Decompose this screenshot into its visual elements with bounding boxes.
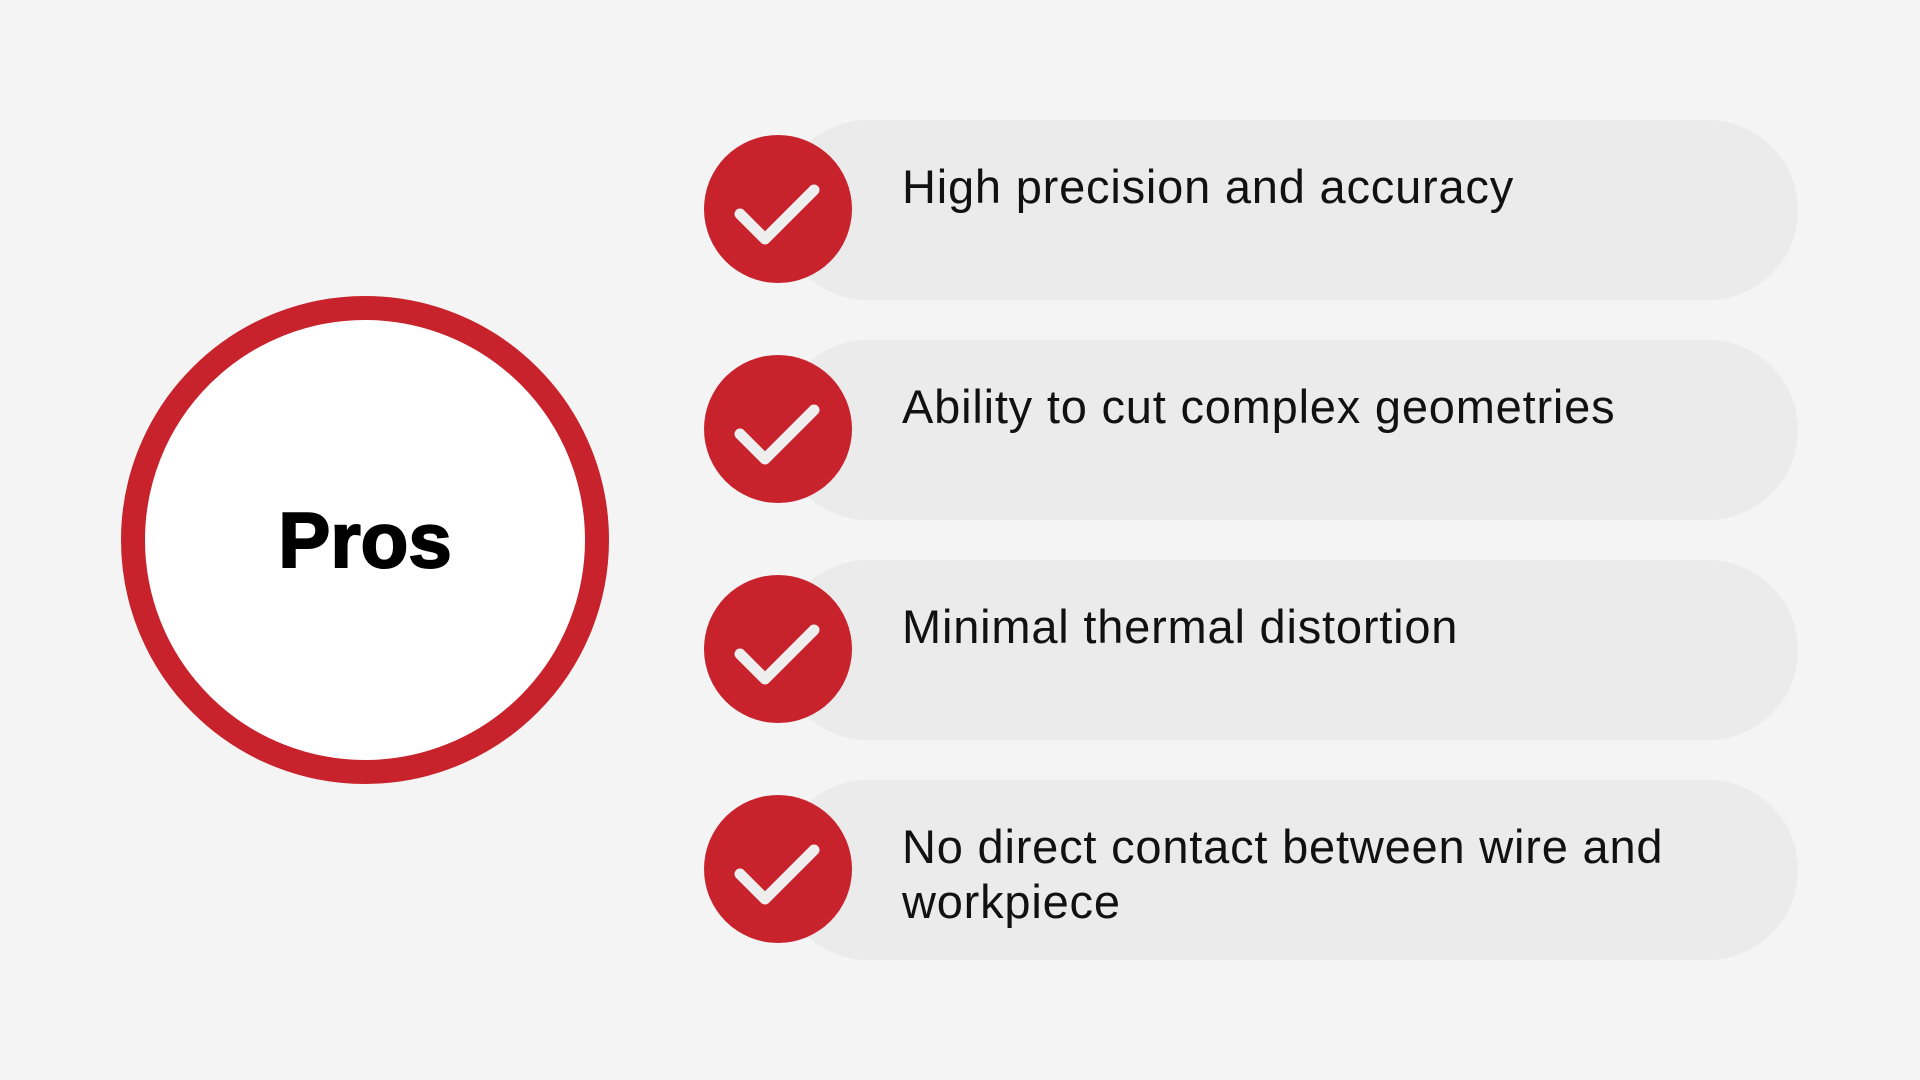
text: Ability to cut complex geometries — [902, 380, 1615, 433]
pros circle — [121, 296, 609, 784]
item 4 — [704, 780, 1798, 960]
icon: check — [704, 135, 852, 283]
text: Minimal thermal distortion — [902, 600, 1458, 653]
icon: check — [704, 795, 852, 943]
icon: check — [704, 355, 852, 503]
text: No direct contact between wire and workpiece — [902, 820, 1663, 928]
item 1 — [704, 120, 1798, 300]
item 2 — [704, 340, 1798, 520]
text: High precision and accuracy — [902, 160, 1514, 213]
heading: Pros: Pros — [278, 496, 452, 584]
icon: check — [704, 575, 852, 723]
item 3 — [704, 560, 1798, 740]
